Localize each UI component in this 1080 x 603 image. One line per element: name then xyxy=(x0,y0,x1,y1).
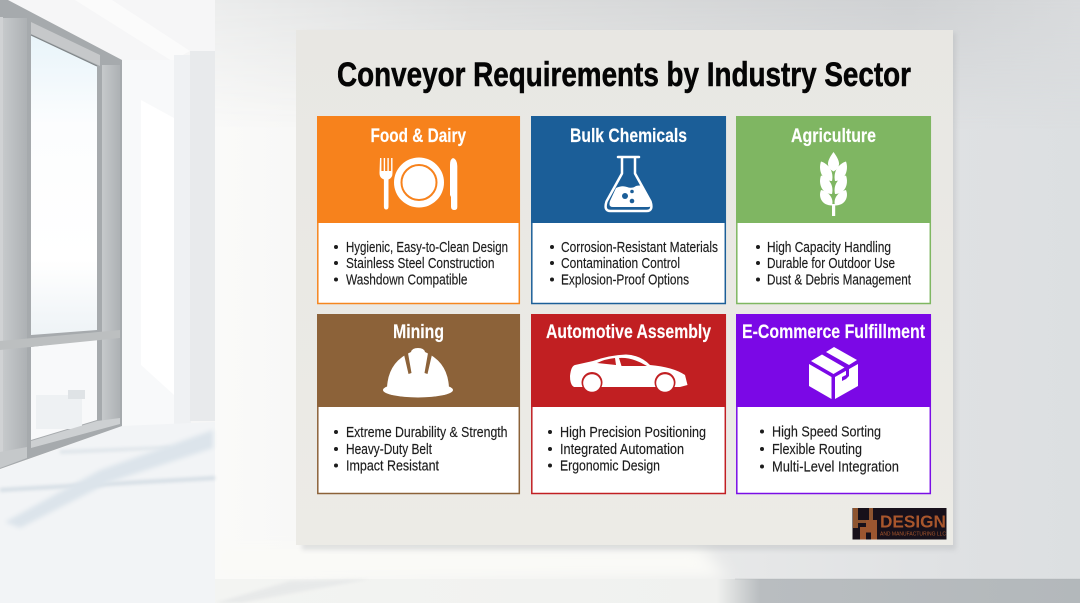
floor xyxy=(0,422,215,603)
title: Conveyor Requirements by Industry Sector xyxy=(337,56,911,94)
heading: Agriculture: Agriculture xyxy=(791,126,876,147)
feature list: Durable for Outdoor Use xyxy=(767,256,895,272)
feature list xyxy=(334,425,508,474)
feature list: Washdown Compatible xyxy=(346,272,468,288)
icon: flask xyxy=(606,157,652,211)
panel: Food & Dairy xyxy=(317,116,520,304)
feature list xyxy=(548,425,706,474)
ceiling xyxy=(0,0,215,61)
icon: wheat xyxy=(820,152,847,216)
panel: Mining xyxy=(317,314,520,494)
sill xyxy=(31,418,120,448)
panel: E-Commerce Fulfillment xyxy=(736,314,931,494)
window glass lower xyxy=(31,339,97,440)
feature list xyxy=(756,240,911,288)
poster panel xyxy=(296,30,953,545)
heading: Mining: Mining xyxy=(393,322,444,343)
feature list: Integrated Automation xyxy=(560,442,684,458)
icon: fork, plate and knife xyxy=(379,158,457,210)
feature list: High Precision Positioning xyxy=(560,425,706,441)
right post xyxy=(102,65,120,423)
heading: Automotive Assembly: Automotive Assembly xyxy=(546,322,711,343)
icon: package box xyxy=(809,347,858,399)
feature list: Corrosion-Resistant Materials xyxy=(561,240,718,256)
feature list xyxy=(334,240,508,288)
panel: Automotive Assembly xyxy=(531,314,726,494)
feature list: Flexible Routing xyxy=(772,442,862,458)
feature list: Ergonomic Design xyxy=(560,458,660,474)
window glass upper xyxy=(31,35,97,335)
feature list: Explosion-Proof Options xyxy=(561,272,689,288)
feature list: Impact Resistant xyxy=(346,458,439,474)
feature list: Stainless Steel Construction xyxy=(346,256,494,272)
feature list: Dust & Debris Management xyxy=(767,272,911,288)
feature list: Heavy-Duty Belt xyxy=(346,442,432,458)
panel: Agriculture xyxy=(736,116,931,304)
feature list: Hygienic, Easy-to-Clean Design xyxy=(346,240,508,256)
feature list xyxy=(760,424,899,476)
window frame xyxy=(0,0,122,469)
horizontal mullion xyxy=(0,330,120,350)
icon: hard hat xyxy=(383,348,453,398)
feature list: Extreme Durability & Strength xyxy=(346,425,508,441)
feature list xyxy=(550,240,718,288)
feature list: High Speed Sorting xyxy=(772,424,881,440)
logo: H&H Design and Manufacturing: AND MANUFACTURING LLC xyxy=(880,532,946,538)
feature list: Contamination Control xyxy=(561,256,680,272)
poster shadow xyxy=(302,33,956,550)
heading: E-Commerce Fulfillment: E-Commerce Fulfillment xyxy=(742,322,926,343)
feature list: Multi-Level Integration xyxy=(772,460,899,476)
panel: Bulk Chemicals xyxy=(531,116,726,304)
logo: H&H Design and Manufacturing: DESIGN xyxy=(880,512,946,532)
window and side wall xyxy=(0,0,215,603)
side wall xyxy=(122,60,174,426)
heading: Bulk Chemicals: Bulk Chemicals xyxy=(570,126,687,147)
heading: Food & Dairy: Food & Dairy xyxy=(370,126,466,147)
feature list: High Capacity Handling xyxy=(767,240,891,256)
logo: H&H Design and Manufacturing xyxy=(852,508,946,540)
icon: car xyxy=(570,354,688,393)
